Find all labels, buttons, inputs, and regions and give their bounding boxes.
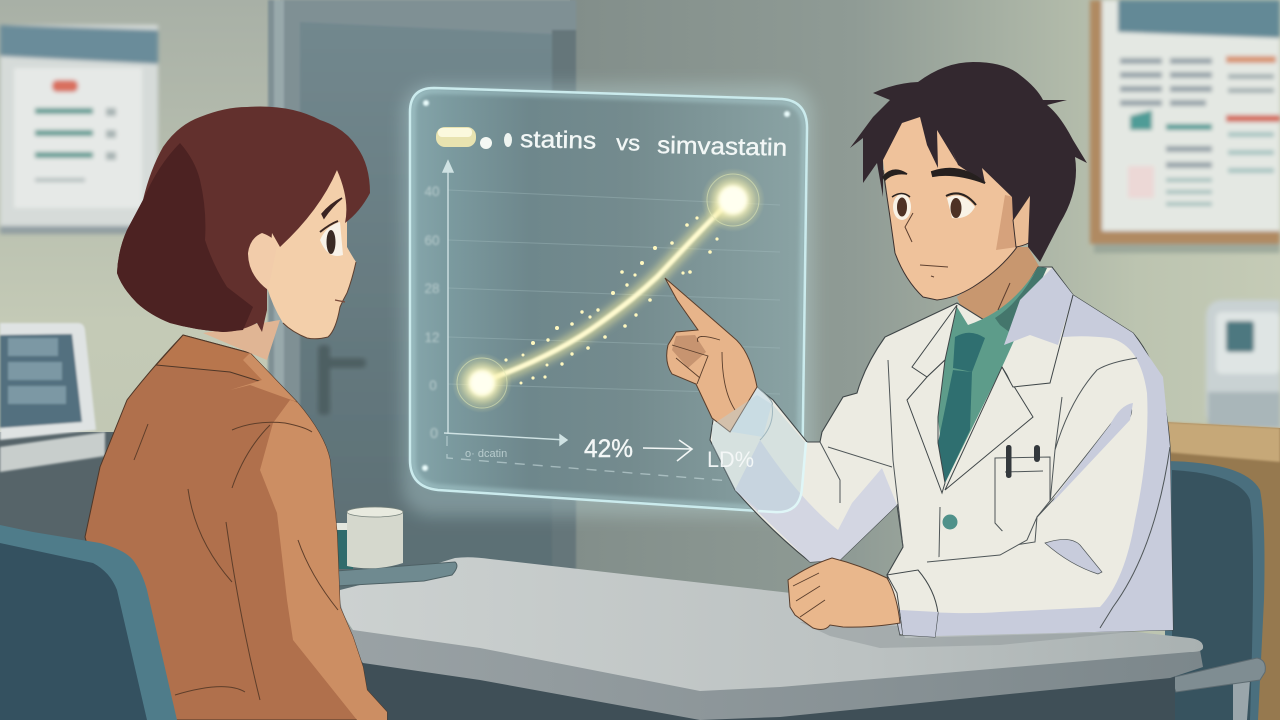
neck [957,247,1040,325]
doctor's chair [1165,461,1265,720]
panel inner edge glow [413,91,804,509]
pointing hand [665,278,757,432]
patient ear [248,233,277,290]
chart gridlines [448,190,780,394]
patient figure [0,107,387,720]
y axis labels: 0 [429,378,437,393]
patient neck [203,320,280,360]
coat button [942,514,958,530]
patient's chair [0,525,177,720]
tray [336,562,457,586]
holographic chart panel [402,84,814,516]
medical device on right counter [1206,300,1280,430]
patient hair shadow [117,143,253,332]
y axis labels: 12 [424,330,440,345]
chart axes [443,161,780,485]
x axis caption: o· dcatin [465,448,507,460]
end point [701,168,765,232]
ear [1013,195,1048,247]
nose and mouth [905,213,1010,310]
sleeve seen through panel [712,395,805,512]
coat right lapel [945,367,1033,490]
glowing trend line [452,168,765,413]
jacket lit area [260,400,387,720]
arm seam [1100,447,1170,628]
green shirt [938,267,1052,483]
shirt cuff [713,387,772,437]
patient mouth [335,300,345,302]
chart heading: simvastatin [657,132,787,162]
lab coat shading [895,268,1173,636]
y axis labels: 28 [424,281,440,296]
table top [340,557,1203,691]
result text: 42% arrow LD%: LD% [707,447,754,472]
result text: 42% arrow LD% [584,435,754,472]
chart heading [436,126,787,162]
background: door and frame [268,0,576,600]
sleeve shading [735,440,897,562]
y axis labels: 40 [424,184,440,199]
table lower shadow [340,640,1175,720]
patient hair [117,107,370,332]
result text: 42% arrow LD%: 42% [584,435,633,463]
patient eyebrow [322,198,342,218]
poster: left wall chart [0,25,158,234]
jacket collar [156,335,297,402]
patient face [250,170,356,339]
y axis labels [424,184,440,442]
counter on right [1165,422,1280,720]
coat pocket and pens [995,445,1050,545]
panel outer glow [402,84,814,516]
patient eye [320,221,343,256]
start point [452,353,512,413]
panel edge over sleeve [758,442,806,512]
sparkle dots [504,216,719,384]
eyes [892,193,976,220]
y axis labels: 0 [430,426,438,442]
shelf with laptop on the left [0,323,120,552]
lab coat body [710,267,1173,635]
table shadow under hand [800,622,1130,648]
coat front sleeve [927,408,1132,562]
chair armrest [1170,658,1265,692]
green tie [938,333,985,483]
jacket fold lines [134,422,338,700]
hair [850,62,1087,262]
face [883,115,1030,300]
panel body [410,88,807,512]
orange jacket [85,335,387,720]
coat cuff [887,570,938,637]
y axis labels: 60 [424,233,440,248]
elbow shadow [1045,539,1102,574]
eyebrows [883,170,907,180]
background: clinic wall left [0,0,280,720]
panel corner dots [422,100,790,501]
chart heading: statins [520,126,596,155]
coffee mug [336,507,403,569]
table front edge band [340,600,1203,720]
doctor figure [665,62,1173,637]
chart heading: vs [616,130,640,156]
poster: right wall bulletin board [1090,0,1280,253]
coat seams [820,358,1137,558]
background: clinic wall right [570,0,1280,720]
resting hand [788,558,900,629]
coat left lapel [912,305,957,377]
table with tray and mug [336,507,1203,720]
